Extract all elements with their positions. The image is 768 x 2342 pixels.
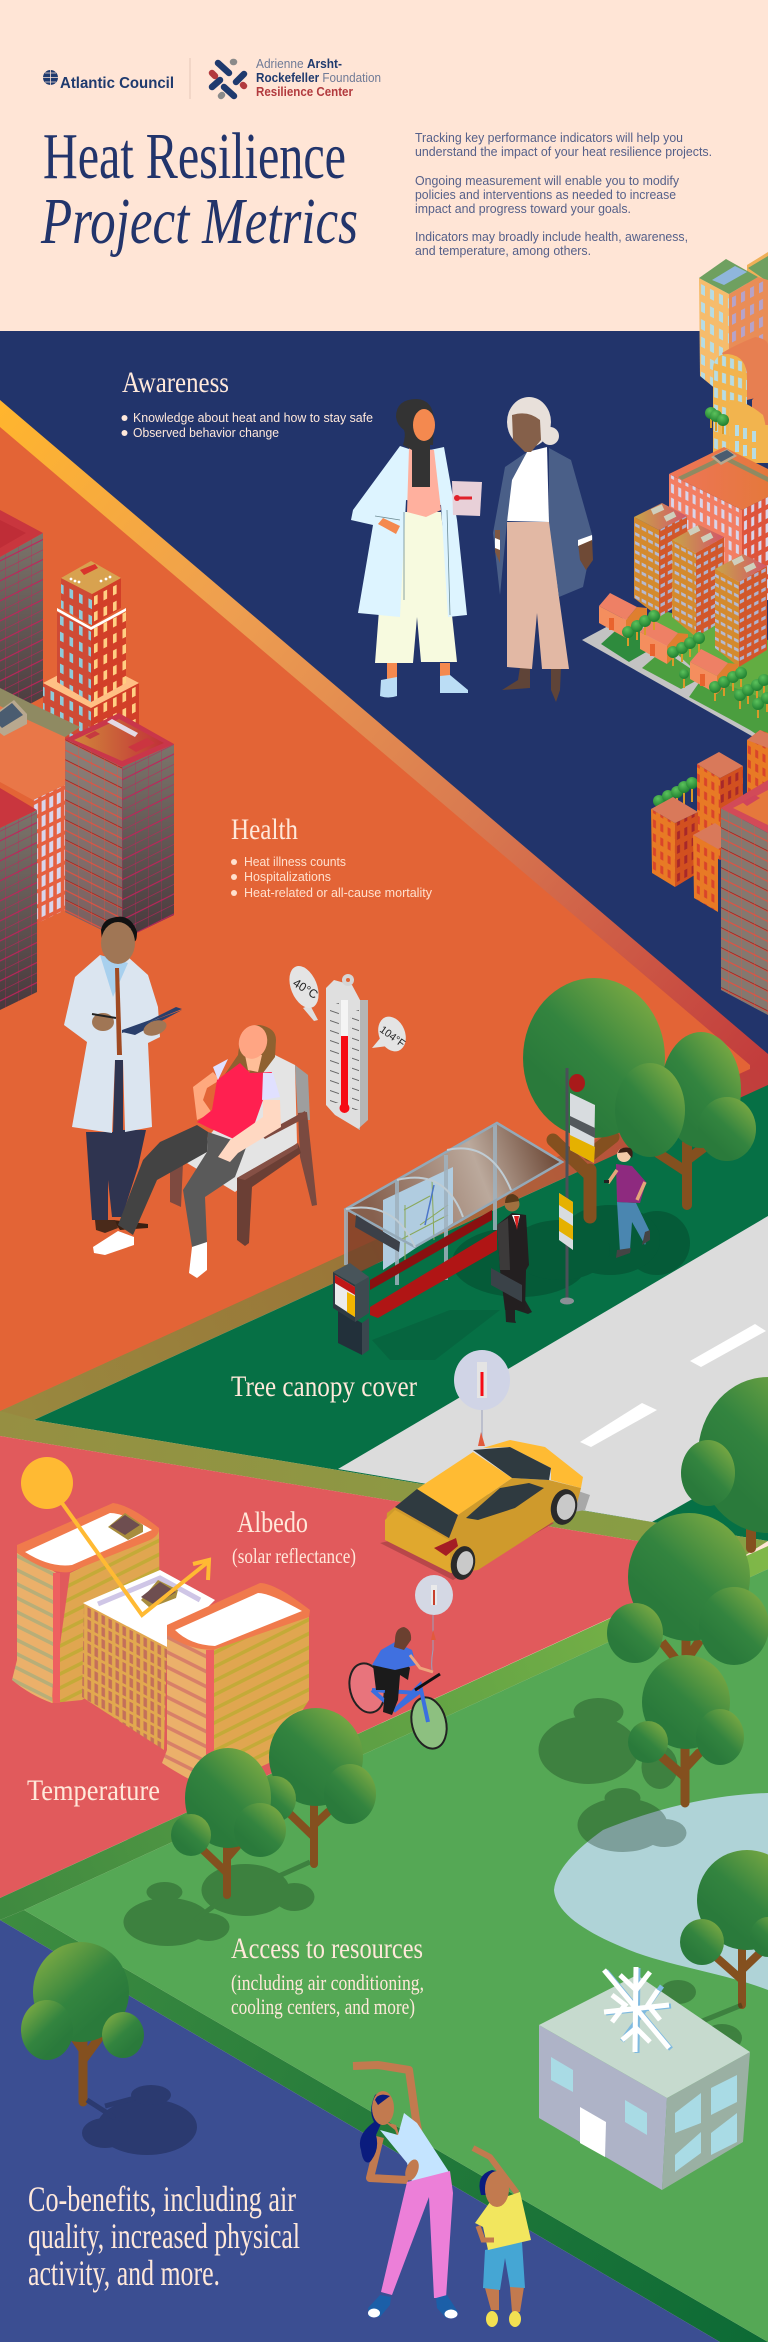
- sun: [21, 1457, 73, 1509]
- subheading: access details: cooling centers, and more): [231, 1994, 415, 2019]
- building: cooling centre: [539, 1975, 750, 2190]
- heading: co-benefits: activity, and more.: [28, 2253, 220, 2293]
- tree: centre right: [254, 1708, 376, 1864]
- building: red stepped tower: [43, 561, 139, 760]
- intro text: Indicators may broadly include health, awareness,: [415, 229, 688, 244]
- panel: tree canopy (dark green ground): [34, 1085, 768, 1541]
- tree: large canopy left: [523, 978, 665, 1217]
- trees: small row by yellow towers: [705, 407, 729, 434]
- callout: 40°C: 40°C: [290, 976, 321, 1002]
- subheading: access details: [231, 1970, 424, 2019]
- heading: Albedo: Albedo: [237, 1506, 308, 1539]
- buildings: left grey towers: [0, 510, 43, 720]
- bullet list: awareness: Observed behavior change: [133, 425, 279, 440]
- logo: Adrienne Arsht-Rockefeller Foundation Resilience Center: Resilience Center: [256, 85, 353, 99]
- intro text: policies and interventions as needed to increase: [415, 187, 676, 202]
- figure: woman stretching: [353, 2065, 458, 2318]
- figure: doctor with clipboard: [64, 917, 182, 1233]
- heading: Access to resources: Access to resources: [231, 1932, 423, 1965]
- building: large grey tower with red roof: [65, 713, 174, 940]
- tree: large canopy right: [615, 1032, 756, 1205]
- shadow: tree behind cooling centre: [660, 1980, 742, 2052]
- heading: co-benefits: Co-benefits, including air: [28, 2179, 296, 2219]
- figure: older woman in cardigan: [493, 397, 593, 702]
- logo: Adrienne Arsht-Rockefeller Foundation Resilience Center: [190, 57, 381, 99]
- tree: park lower: [628, 1655, 744, 1803]
- shadow: bottom left tree: [82, 2085, 197, 2155]
- building: orange roof block with solar panel: [0, 688, 80, 925]
- buildings: three apartment towers: [634, 503, 767, 667]
- chair: [170, 1055, 317, 1246]
- intro text: Ongoing measurement will enable you to modify: [415, 173, 679, 188]
- balloon marker: road: [454, 1350, 510, 1446]
- icon: snowflake: [604, 1967, 671, 2053]
- logo: Atlantic Council: [43, 70, 174, 92]
- subheading: access details: (including air conditioning,: [231, 1970, 424, 1995]
- panel: access to resources (green ground): [0, 1546, 768, 2342]
- navy awareness panel: [0, 331, 768, 1131]
- intro text: [415, 130, 712, 258]
- bullet list: awareness: Knowledge about heat and how to stay safe: [133, 410, 373, 425]
- arrow: reflected sunlight: [62, 1503, 209, 1615]
- bullet list: health: [231, 854, 432, 900]
- tree: road side right: [681, 1377, 768, 1548]
- title: Heat Resilience: [43, 120, 346, 193]
- tree: centre left: [171, 1748, 286, 1895]
- tree: bottom left: [21, 1942, 144, 2102]
- figure: patient: [93, 1022, 281, 1278]
- logo: Adrienne Arsht-Rockefeller Foundation Resilience Center: Adrienne Arsht-: [256, 57, 342, 71]
- bus stop pole and signs: [559, 1068, 595, 1304]
- title: [40, 120, 358, 258]
- trees: neighbourhood rows: [622, 610, 768, 718]
- panel: albedo (red ground): [0, 1411, 768, 1898]
- figure: man with briefcase: [491, 1194, 532, 1323]
- bus shelter: [333, 1123, 562, 1355]
- building: albedo rear left: [12, 1503, 160, 1703]
- thermometer: [326, 974, 368, 1130]
- logo: Atlantic Council: Atlantic Council: [60, 75, 174, 92]
- neighbourhood ground and lawns: [582, 612, 768, 745]
- intro text: impact and progress toward your goals.: [415, 201, 631, 216]
- building: bottom-left grey tower: [0, 788, 37, 1010]
- heading: Health: Health: [231, 813, 298, 846]
- tree: park upper: [607, 1513, 768, 1670]
- logo: Adrienne Arsht-Rockefeller Foundation Resilience Center: Rockefeller Foundation: [256, 71, 381, 85]
- title: Project Metrics: [40, 185, 358, 258]
- heading: Awareness: Awareness: [122, 366, 229, 399]
- figure: woman in hijab and lab coat: [351, 399, 482, 698]
- figure: man walking with phone: [604, 1148, 650, 1258]
- heading: Temperature: Temperature: [27, 1774, 160, 1807]
- cyclist: [344, 1627, 452, 1752]
- header background: [0, 0, 768, 331]
- bullet list: awareness: [122, 410, 373, 440]
- building: coral block: [669, 447, 768, 600]
- callout: 104°F: 104°F: [377, 1024, 407, 1050]
- car: [380, 1440, 590, 1582]
- subheading: solar reflectance: (solar reflectance): [232, 1544, 356, 1568]
- bullet list: health: Heat-related or all-cause mortality: [244, 885, 432, 900]
- intro text: Tracking key performance indicators will help you: [415, 130, 683, 145]
- shadows: park trees: [123, 1698, 686, 1946]
- buildings: mid right orange blocks and grey tower: [651, 730, 768, 1015]
- shadows: bus stop and trees on dark green: [372, 1205, 690, 1360]
- building: albedo centre: [82, 1570, 215, 1750]
- pond: [554, 1793, 768, 1990]
- bullet list: health: Hospitalizations: [244, 869, 331, 884]
- heading: Tree canopy cover: Tree canopy cover: [231, 1370, 417, 1403]
- heading: co-benefits: quality, increased physical: [28, 2216, 300, 2256]
- houses: [599, 593, 738, 694]
- balloon marker: cyclist: [415, 1575, 453, 1670]
- heading: co-benefits: [28, 2179, 300, 2293]
- building: albedo front right: [162, 1583, 310, 1790]
- panel: health (orange ground with edge band): [0, 400, 768, 1436]
- intro text: and temperature, among others.: [415, 243, 591, 258]
- callout: 40°C: [284, 962, 324, 1021]
- intro text: understand the impact of your heat resilience projects.: [415, 144, 712, 159]
- tree: lower right near pond: [680, 1850, 768, 2005]
- road with lane dashes: [338, 1216, 768, 1522]
- figure: child stretching: [473, 2148, 531, 2327]
- solar panel on rear roof: [108, 1513, 143, 1540]
- panel: co-benefits (blue ground): [0, 1920, 720, 2342]
- buildings: top right yellow towers: [699, 252, 768, 480]
- callout: 104°F: [372, 1012, 411, 1056]
- bullet list: health: Heat illness counts: [244, 854, 346, 869]
